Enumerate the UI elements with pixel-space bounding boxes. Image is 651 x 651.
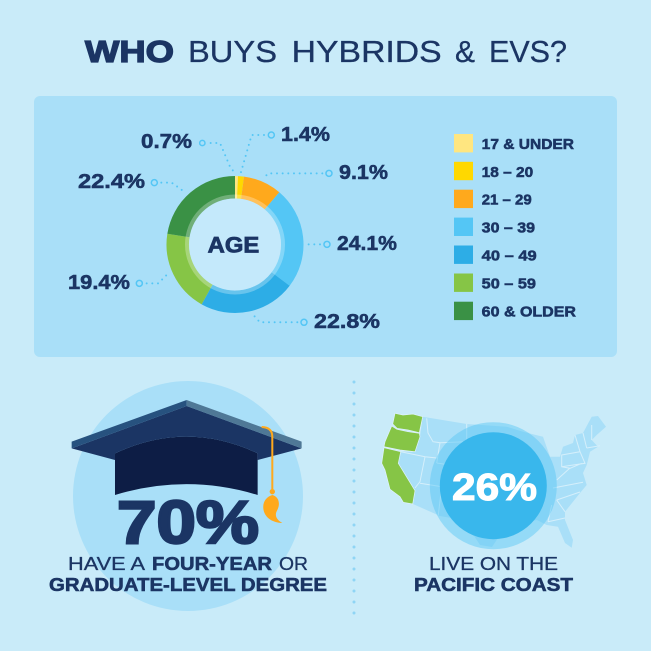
legend bbox=[454, 134, 576, 320]
value labels: 19.4% bbox=[68, 271, 130, 294]
value labels: 1.4% bbox=[281, 123, 330, 146]
title: EVS? bbox=[489, 34, 567, 69]
caption bbox=[414, 553, 574, 595]
title bbox=[85, 34, 567, 69]
legend: 50 – 59 bbox=[482, 275, 536, 292]
caption: FOUR-YEAR bbox=[152, 553, 272, 574]
panel: education bbox=[49, 381, 327, 611]
big number: 70% bbox=[117, 489, 259, 556]
legend: 21 – 29 bbox=[482, 192, 532, 209]
highlighted states: WA, OR, CA bbox=[382, 413, 423, 504]
value labels: 22.8% bbox=[314, 310, 380, 333]
caption: HAVE A bbox=[68, 553, 146, 574]
caption: PACIFIC COAST bbox=[414, 574, 574, 595]
caption bbox=[49, 553, 327, 595]
icon: US map bbox=[382, 413, 606, 548]
value labels: 0.7% bbox=[141, 130, 192, 153]
legend: 60 & OLDER bbox=[482, 303, 576, 320]
caption: LIVE ON THE bbox=[429, 553, 558, 574]
value labels: 22.4% bbox=[78, 170, 145, 193]
title: & bbox=[455, 34, 475, 69]
value labels bbox=[68, 123, 397, 333]
panel: pacific coast bbox=[382, 413, 606, 595]
panel: age breakdown bbox=[34, 96, 617, 357]
stat circle: 26% bbox=[452, 467, 537, 509]
donut chart: age bbox=[178, 187, 292, 302]
donut centre label: AGE bbox=[208, 232, 259, 257]
leader lines bbox=[136, 132, 332, 325]
legend: 18 – 20 bbox=[482, 164, 533, 181]
title: HYBRIDS bbox=[292, 34, 442, 69]
legend: 30 – 39 bbox=[482, 220, 535, 237]
icon: graduation cap bbox=[72, 400, 302, 523]
caption: OR bbox=[279, 553, 308, 574]
title: WHO bbox=[85, 34, 174, 69]
legend: 40 – 49 bbox=[482, 247, 537, 264]
value labels: 24.1% bbox=[337, 232, 397, 255]
title: BUYS bbox=[188, 34, 277, 69]
legend: 17 & UNDER bbox=[482, 136, 574, 153]
caption: GRADUATE-LEVEL DEGREE bbox=[49, 574, 327, 595]
value labels: 9.1% bbox=[339, 161, 388, 184]
stat circle bbox=[430, 422, 557, 549]
